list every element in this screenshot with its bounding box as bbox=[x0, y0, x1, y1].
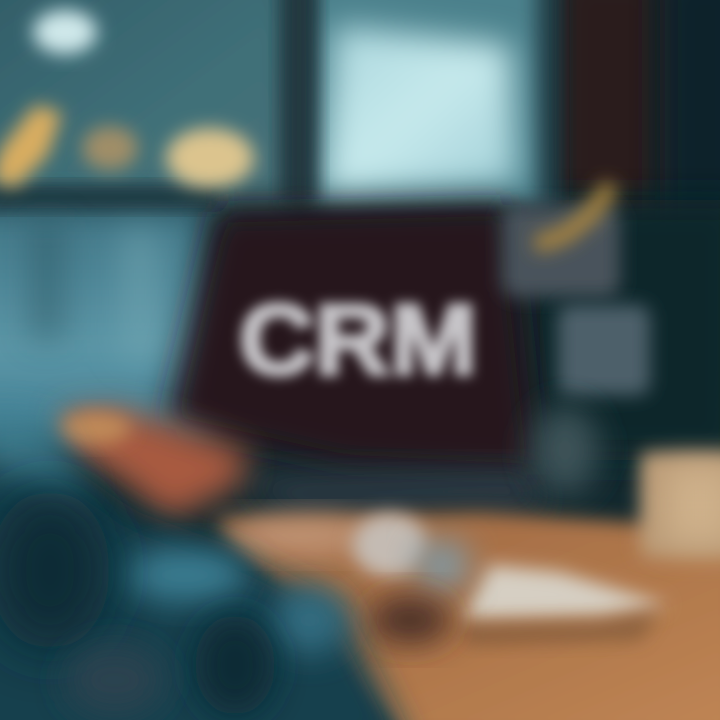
laptop: dark screen bbox=[165, 205, 545, 512]
hand bbox=[59, 408, 250, 520]
floating icon: chart card bbox=[502, 185, 620, 297]
window frame: dark horizontal bar bbox=[0, 186, 220, 208]
floating icon: small card bbox=[531, 406, 599, 494]
city lights bbox=[0, 10, 254, 188]
clutter on desk bbox=[225, 513, 470, 644]
window: bright pane bbox=[312, 0, 537, 205]
desk: wooden surface bbox=[215, 512, 720, 720]
shadow under paper bbox=[460, 612, 660, 645]
paper on desk bbox=[462, 565, 668, 620]
window frame: dark vertical bar bbox=[282, 0, 316, 200]
text: CRM on laptop: CRM bbox=[239, 284, 477, 396]
floating icon: lower card bbox=[558, 305, 650, 395]
vertical streaks in lower window bbox=[30, 220, 160, 360]
mug bbox=[640, 452, 720, 557]
sleeve: teal fabric bbox=[0, 410, 410, 720]
